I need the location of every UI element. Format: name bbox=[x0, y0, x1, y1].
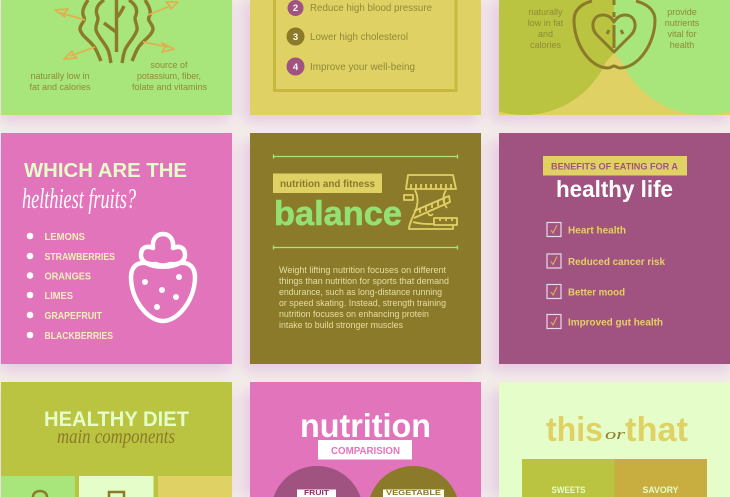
savory column: SAVORY bbox=[642, 485, 678, 495]
savory column bbox=[614, 459, 707, 497]
icon: apple bbox=[574, 0, 655, 68]
label bbox=[318, 440, 412, 460]
sweets column: SWEETS bbox=[552, 485, 586, 495]
panel: healthiest fruits bbox=[1, 133, 232, 364]
text: source of nutrients: folate and vitamins bbox=[132, 82, 207, 93]
body text: endurance, such as long-distance running bbox=[279, 287, 442, 298]
list item 3: 3 bbox=[293, 32, 298, 43]
fruit list: LEMONS bbox=[44, 232, 85, 243]
component tile 1 bbox=[1, 476, 75, 497]
text: source of nutrients bbox=[132, 60, 207, 93]
text: right column: health bbox=[670, 40, 694, 50]
fruit circle: FRUIT bbox=[304, 488, 329, 497]
heading: nutrition bbox=[300, 407, 431, 444]
script or: or bbox=[605, 427, 625, 443]
label bbox=[273, 174, 382, 193]
heading: HEALTHY DIET bbox=[44, 408, 189, 431]
script subheading: main components bbox=[57, 426, 175, 448]
icon: leafy vegetable bbox=[80, 0, 153, 63]
body text bbox=[279, 265, 449, 331]
fruit list: ORANGES bbox=[44, 272, 91, 282]
sweets column bbox=[522, 459, 614, 497]
panel: healthy diet bbox=[1, 382, 232, 497]
list item 2: 2 bbox=[293, 3, 298, 14]
fruit list: GRAPEFRUIT bbox=[44, 311, 102, 322]
label bbox=[543, 156, 687, 176]
component tile 3 bbox=[158, 476, 232, 497]
text: right column: nutrients bbox=[665, 18, 700, 28]
checklist: Heart health bbox=[568, 224, 626, 236]
panel: nutrition and fitness bbox=[250, 133, 481, 364]
rule top bbox=[274, 154, 458, 158]
body text: things than nutrition for sports that demand bbox=[279, 276, 449, 287]
label: BENEFITS OF EATING FOR A bbox=[551, 162, 678, 172]
heading this: this bbox=[546, 411, 603, 449]
text: right column bbox=[665, 7, 700, 50]
fruit list: BLACKBERRIES bbox=[44, 331, 113, 342]
checklist bbox=[547, 222, 665, 328]
text: left column: low in fat bbox=[528, 18, 564, 28]
text: low in calories: naturally low in bbox=[30, 71, 90, 82]
heading that: that bbox=[625, 411, 688, 449]
text: left column: and bbox=[538, 29, 553, 39]
checklist: Better mood bbox=[568, 286, 625, 298]
text: left column: naturally bbox=[528, 7, 563, 17]
checklist: Reduced cancer risk bbox=[568, 256, 665, 268]
text: source of nutrients: source of bbox=[150, 60, 188, 71]
icon: waist with measuring tape bbox=[404, 175, 457, 229]
rule bottom bbox=[274, 246, 458, 250]
panel: healthy life benefits bbox=[499, 133, 730, 364]
fruit list: STRAWBERRIES bbox=[44, 252, 115, 263]
text: right column: vital for bbox=[667, 29, 697, 39]
body text: intake to build stronger muscles bbox=[279, 320, 403, 331]
panel: numbered benefits bbox=[250, 0, 481, 115]
fruit list bbox=[27, 232, 115, 342]
heading: WHICH ARE THE bbox=[24, 159, 187, 182]
list item 3 bbox=[286, 28, 408, 46]
heading: balance bbox=[274, 195, 402, 233]
right green circle bbox=[614, 0, 730, 115]
fruit list: LIMES bbox=[44, 291, 73, 302]
frame bbox=[274, 0, 456, 90]
checklist: Improved gut health bbox=[568, 316, 663, 328]
vegetable circle: VEGETABLE bbox=[386, 488, 441, 497]
text: right column: provide bbox=[667, 7, 697, 17]
panel: nutrition comparison bbox=[250, 382, 481, 497]
icon: four arrows bbox=[55, 2, 178, 59]
component tile 2 bbox=[79, 476, 154, 497]
label: nutrition and fitness bbox=[280, 179, 375, 190]
text: left column: calories bbox=[530, 40, 562, 50]
list item 4: 4 bbox=[293, 62, 299, 73]
list item 2: Reduce high blood pressure bbox=[310, 2, 432, 14]
heading: healthy life bbox=[556, 176, 673, 202]
list item 4: Improve your well-being bbox=[310, 61, 415, 73]
body text: nutrition focuses on enhancing protein bbox=[279, 309, 429, 320]
body text: Weight lifting nutrition focuses on different bbox=[279, 265, 446, 276]
body text: or speed skating. Instead, strength training bbox=[279, 298, 446, 309]
text: low in calories: fat and calories bbox=[30, 82, 91, 93]
text: source of nutrients: potassium, fiber, bbox=[137, 71, 201, 82]
panel: apple comparison bbox=[499, 0, 730, 115]
panel: low-calorie vegetable bbox=[1, 0, 232, 115]
vegetable circle bbox=[370, 466, 457, 497]
script subheading: helthiest fruits? bbox=[22, 183, 136, 215]
list item 2 bbox=[288, 0, 432, 16]
text: low in calories bbox=[30, 71, 91, 93]
left lime circle bbox=[499, 0, 614, 115]
fruit circle bbox=[274, 466, 360, 497]
label: COMPARISION bbox=[331, 446, 400, 457]
text: left column bbox=[528, 7, 564, 50]
list item 3: Lower high cholesterol bbox=[310, 31, 408, 43]
icon: strawberry bbox=[131, 234, 195, 321]
panel: this or that bbox=[499, 382, 730, 497]
list item 4 bbox=[286, 58, 415, 76]
